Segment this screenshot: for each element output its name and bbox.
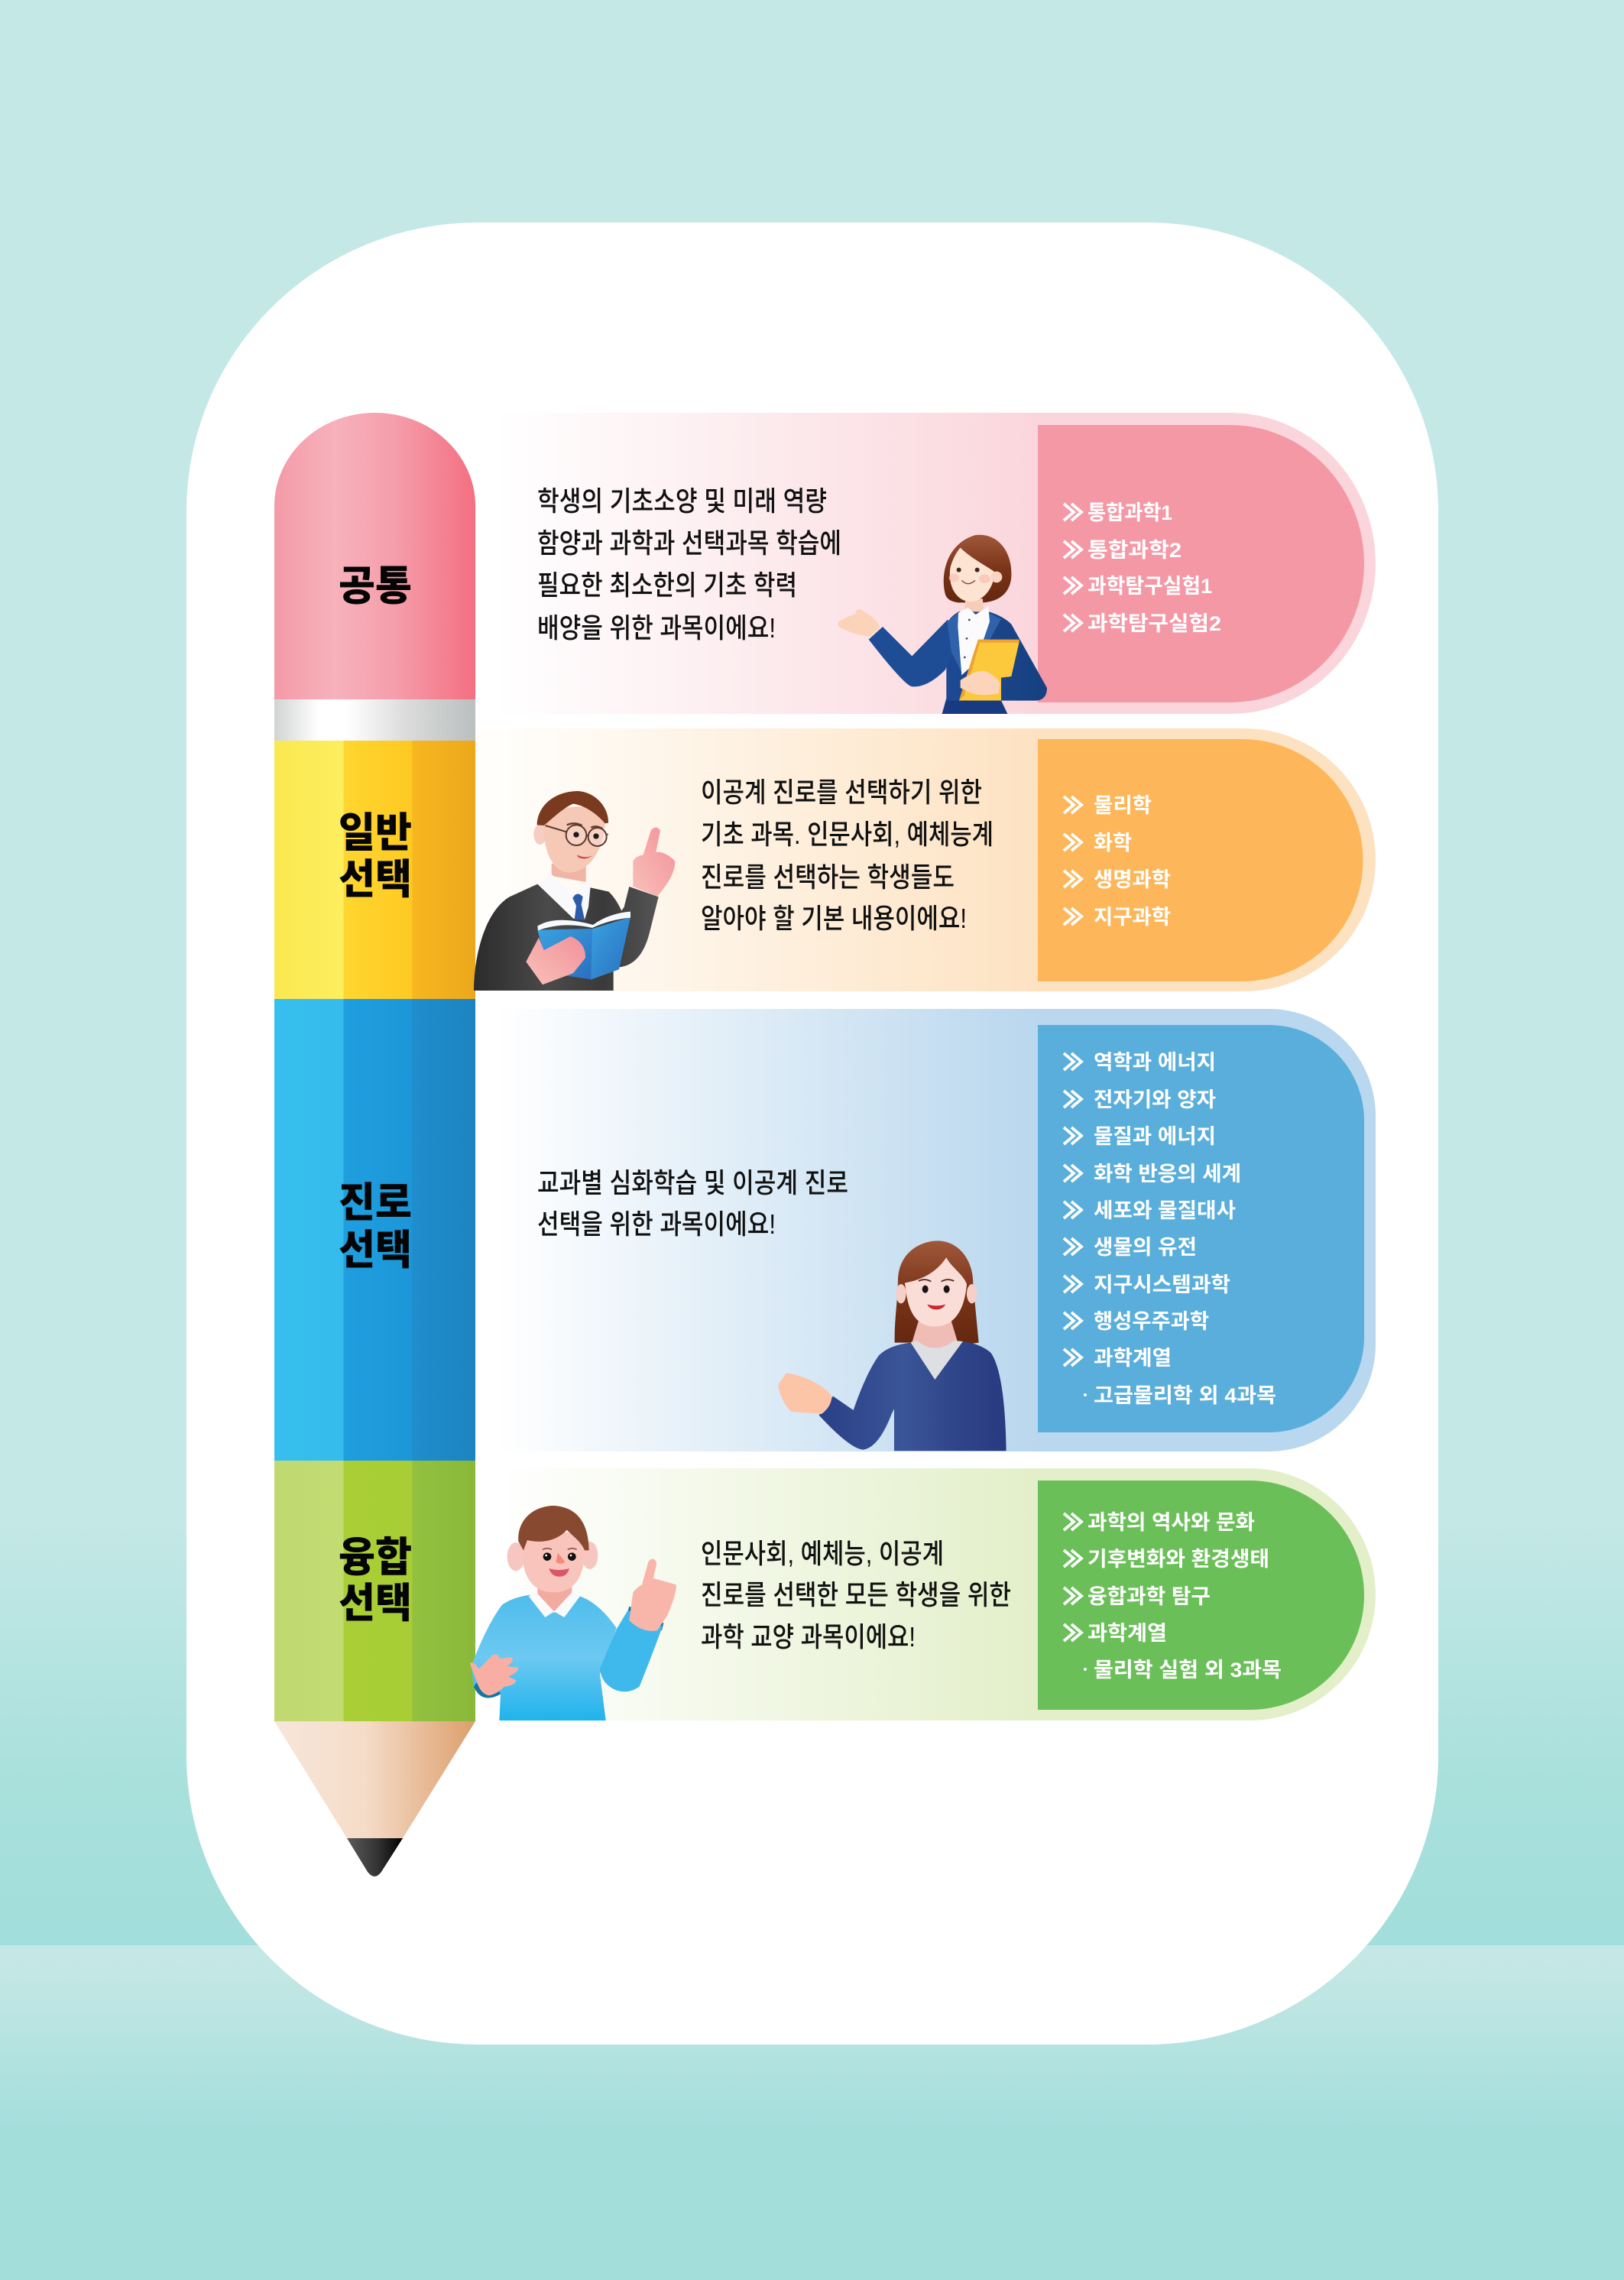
description text [701, 777, 994, 934]
subject list [1064, 1051, 1276, 1407]
pencil labels [339, 563, 412, 1626]
description text: 교과별 심화학습 및 이공계 진로 [537, 1167, 848, 1198]
subject list: 화학 반응의 세계 [1094, 1163, 1241, 1185]
pencil segment: blue [274, 999, 475, 1461]
description text: 배양을 위한 과목이에요! [537, 612, 776, 644]
description text: 알아야 할 기본 내용이에요! [701, 903, 967, 934]
subject list: 전자기와 양자 [1094, 1088, 1216, 1111]
description text: 학생의 기초소양 및 미래 역량 [537, 485, 827, 517]
subject list: 통합과학2 [1088, 539, 1182, 562]
pencil [274, 413, 475, 1876]
pencil eraser [274, 413, 475, 699]
subject list: 화학 [1094, 832, 1132, 855]
subject list: 물리학 실험 외 3과목 [1094, 1659, 1282, 1682]
subject list [1064, 1511, 1282, 1682]
label: 융합 선택: 선택 [339, 1581, 412, 1626]
description text: 과학 교양 과목이에요! [701, 1621, 916, 1652]
subject list: 생물의 유전 [1094, 1236, 1197, 1259]
subject list: 행성우주과학 [1094, 1310, 1209, 1333]
subject list: 물리학 [1094, 794, 1152, 817]
subject box [1038, 739, 1363, 981]
white card [186, 222, 1438, 2045]
label: 융합 선택 [339, 1535, 412, 1626]
character: teacher with folder [838, 535, 1047, 714]
subject box [1038, 425, 1364, 702]
label: 진로 선택: 선택 [339, 1228, 412, 1273]
subject list: 물질과 에너지 [1094, 1125, 1216, 1148]
subject list: 고급물리학 외 4과목 [1094, 1384, 1276, 1407]
description text: 필요한 최소한의 기초 학력 [537, 569, 797, 601]
description text [537, 1167, 848, 1240]
description text: 기초 과목. 인문사회, 예체능계 [701, 819, 994, 850]
description text: 이공계 진로를 선택하기 위한 [701, 777, 982, 808]
subject list: 융합과학 탐구 [1088, 1585, 1211, 1608]
subject list: 과학의 역사와 문화 [1088, 1511, 1255, 1534]
character: student with long hair [778, 1241, 1006, 1451]
pencil ferrule [274, 699, 475, 741]
description text: 함양과 과학과 선택과목 학습에 [537, 527, 841, 559]
subject list: 과학계열 [1088, 1622, 1167, 1645]
character: teacher with glasses and book [474, 791, 675, 991]
description text [701, 1538, 1011, 1652]
subject list: 과학계열 [1094, 1347, 1172, 1370]
pencil segment: yellow [274, 741, 475, 999]
panel: 일반선택 [474, 728, 1376, 991]
character: boy student [470, 1506, 676, 1721]
subject list: 과학탐구실험1 [1088, 575, 1212, 598]
subject box [1038, 1025, 1364, 1432]
subject list: 세포와 물질대사 [1094, 1199, 1236, 1222]
pencil wood tip [274, 1721, 475, 1838]
pencil lead [347, 1838, 403, 1876]
description text: 진로를 선택하는 학생들도 [701, 861, 955, 893]
subject list: 생명과학 [1094, 868, 1171, 891]
label: 일반 선택: 선택 [339, 857, 412, 903]
panel background [475, 1468, 1376, 1721]
panel background [475, 728, 1376, 991]
description text: 선택을 위한 과목이에요! [537, 1208, 776, 1240]
description text: 인문사회, 예체능, 이공계 [701, 1538, 944, 1569]
description text [537, 485, 841, 644]
subject box [1038, 1481, 1364, 1710]
pencil segment: green [274, 1461, 475, 1721]
panel: 진로선택 [501, 1009, 1376, 1451]
subject list [1064, 501, 1221, 635]
subject list: 역학과 에너지 [1094, 1051, 1216, 1074]
subject list [1064, 794, 1171, 929]
panel: 공통 [501, 413, 1376, 714]
label: 융합 선택: 융합 [339, 1535, 412, 1581]
panel background [501, 413, 1376, 714]
subject list: 기후변화와 환경생태 [1088, 1548, 1269, 1571]
subject list: 지구시스템과학 [1094, 1273, 1230, 1296]
panel: 융합선택 [470, 1468, 1376, 1721]
panel background [501, 1009, 1376, 1451]
label: 공통: 공통 [339, 563, 412, 609]
subject list: 통합과학1 [1088, 501, 1172, 524]
label: 일반 선택: 일반 [339, 810, 412, 856]
description text: 진로를 선택한 모든 학생을 위한 [701, 1579, 1011, 1610]
label: 일반 선택 [339, 810, 412, 903]
subject list: 과학탐구실험2 [1088, 612, 1221, 635]
subject list: 지구과학 [1094, 906, 1171, 929]
label: 진로 선택: 진로 [339, 1180, 412, 1226]
label: 진로 선택 [339, 1180, 412, 1273]
